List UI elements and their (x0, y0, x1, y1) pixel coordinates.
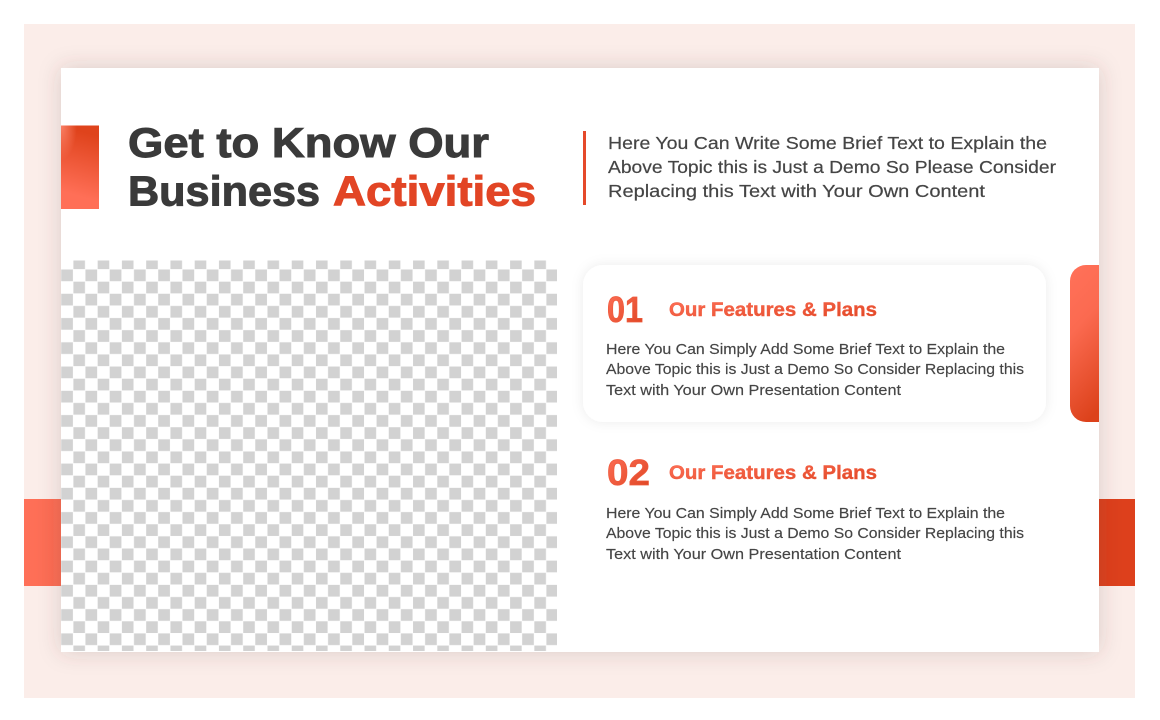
title accent square (61, 126, 99, 209)
title: Activities (333, 168, 536, 214)
intro text: Replacing this Text with Your Own Content (608, 181, 985, 201)
description 01: Text with Your Own Presentation Content (606, 383, 901, 399)
image placeholder checkerboard (61, 260, 557, 651)
title: Business (128, 168, 320, 214)
description 01 (606, 342, 1024, 399)
right gradient tab (1070, 265, 1099, 422)
feature block 02 (606, 452, 1024, 563)
intro text (608, 133, 1056, 201)
title divider line (583, 131, 586, 205)
number 02: 02 (607, 452, 650, 493)
description 02: Text with Your Own Presentation Content (606, 547, 901, 563)
intro text: Above Topic this is Just a Demo So Please Consider (608, 157, 1056, 177)
number 01: 01 (607, 289, 643, 330)
heading 01: Our Features & Plans (669, 300, 877, 321)
title: Get to Know Our (128, 119, 489, 166)
left accent bar (24, 499, 61, 586)
description 02: Above Topic this is Just a Demo So Consider Replacing this (606, 526, 1024, 542)
intro text: Here You Can Write Some Brief Text to Explain the (608, 133, 1047, 153)
feature card 01 (583, 265, 1046, 422)
heading 02: Our Features & Plans (669, 463, 877, 484)
card background (583, 265, 1046, 422)
main white card (61, 68, 1099, 652)
title (128, 119, 536, 214)
description 01: Here You Can Simply Add Some Brief Text to Explain the (606, 342, 1005, 358)
right accent bar (1099, 499, 1135, 586)
description 02 (606, 506, 1024, 563)
description 01: Above Topic this is Just a Demo So Consider Replacing this (606, 362, 1024, 378)
description 02: Here You Can Simply Add Some Brief Text to Explain the (606, 506, 1005, 522)
